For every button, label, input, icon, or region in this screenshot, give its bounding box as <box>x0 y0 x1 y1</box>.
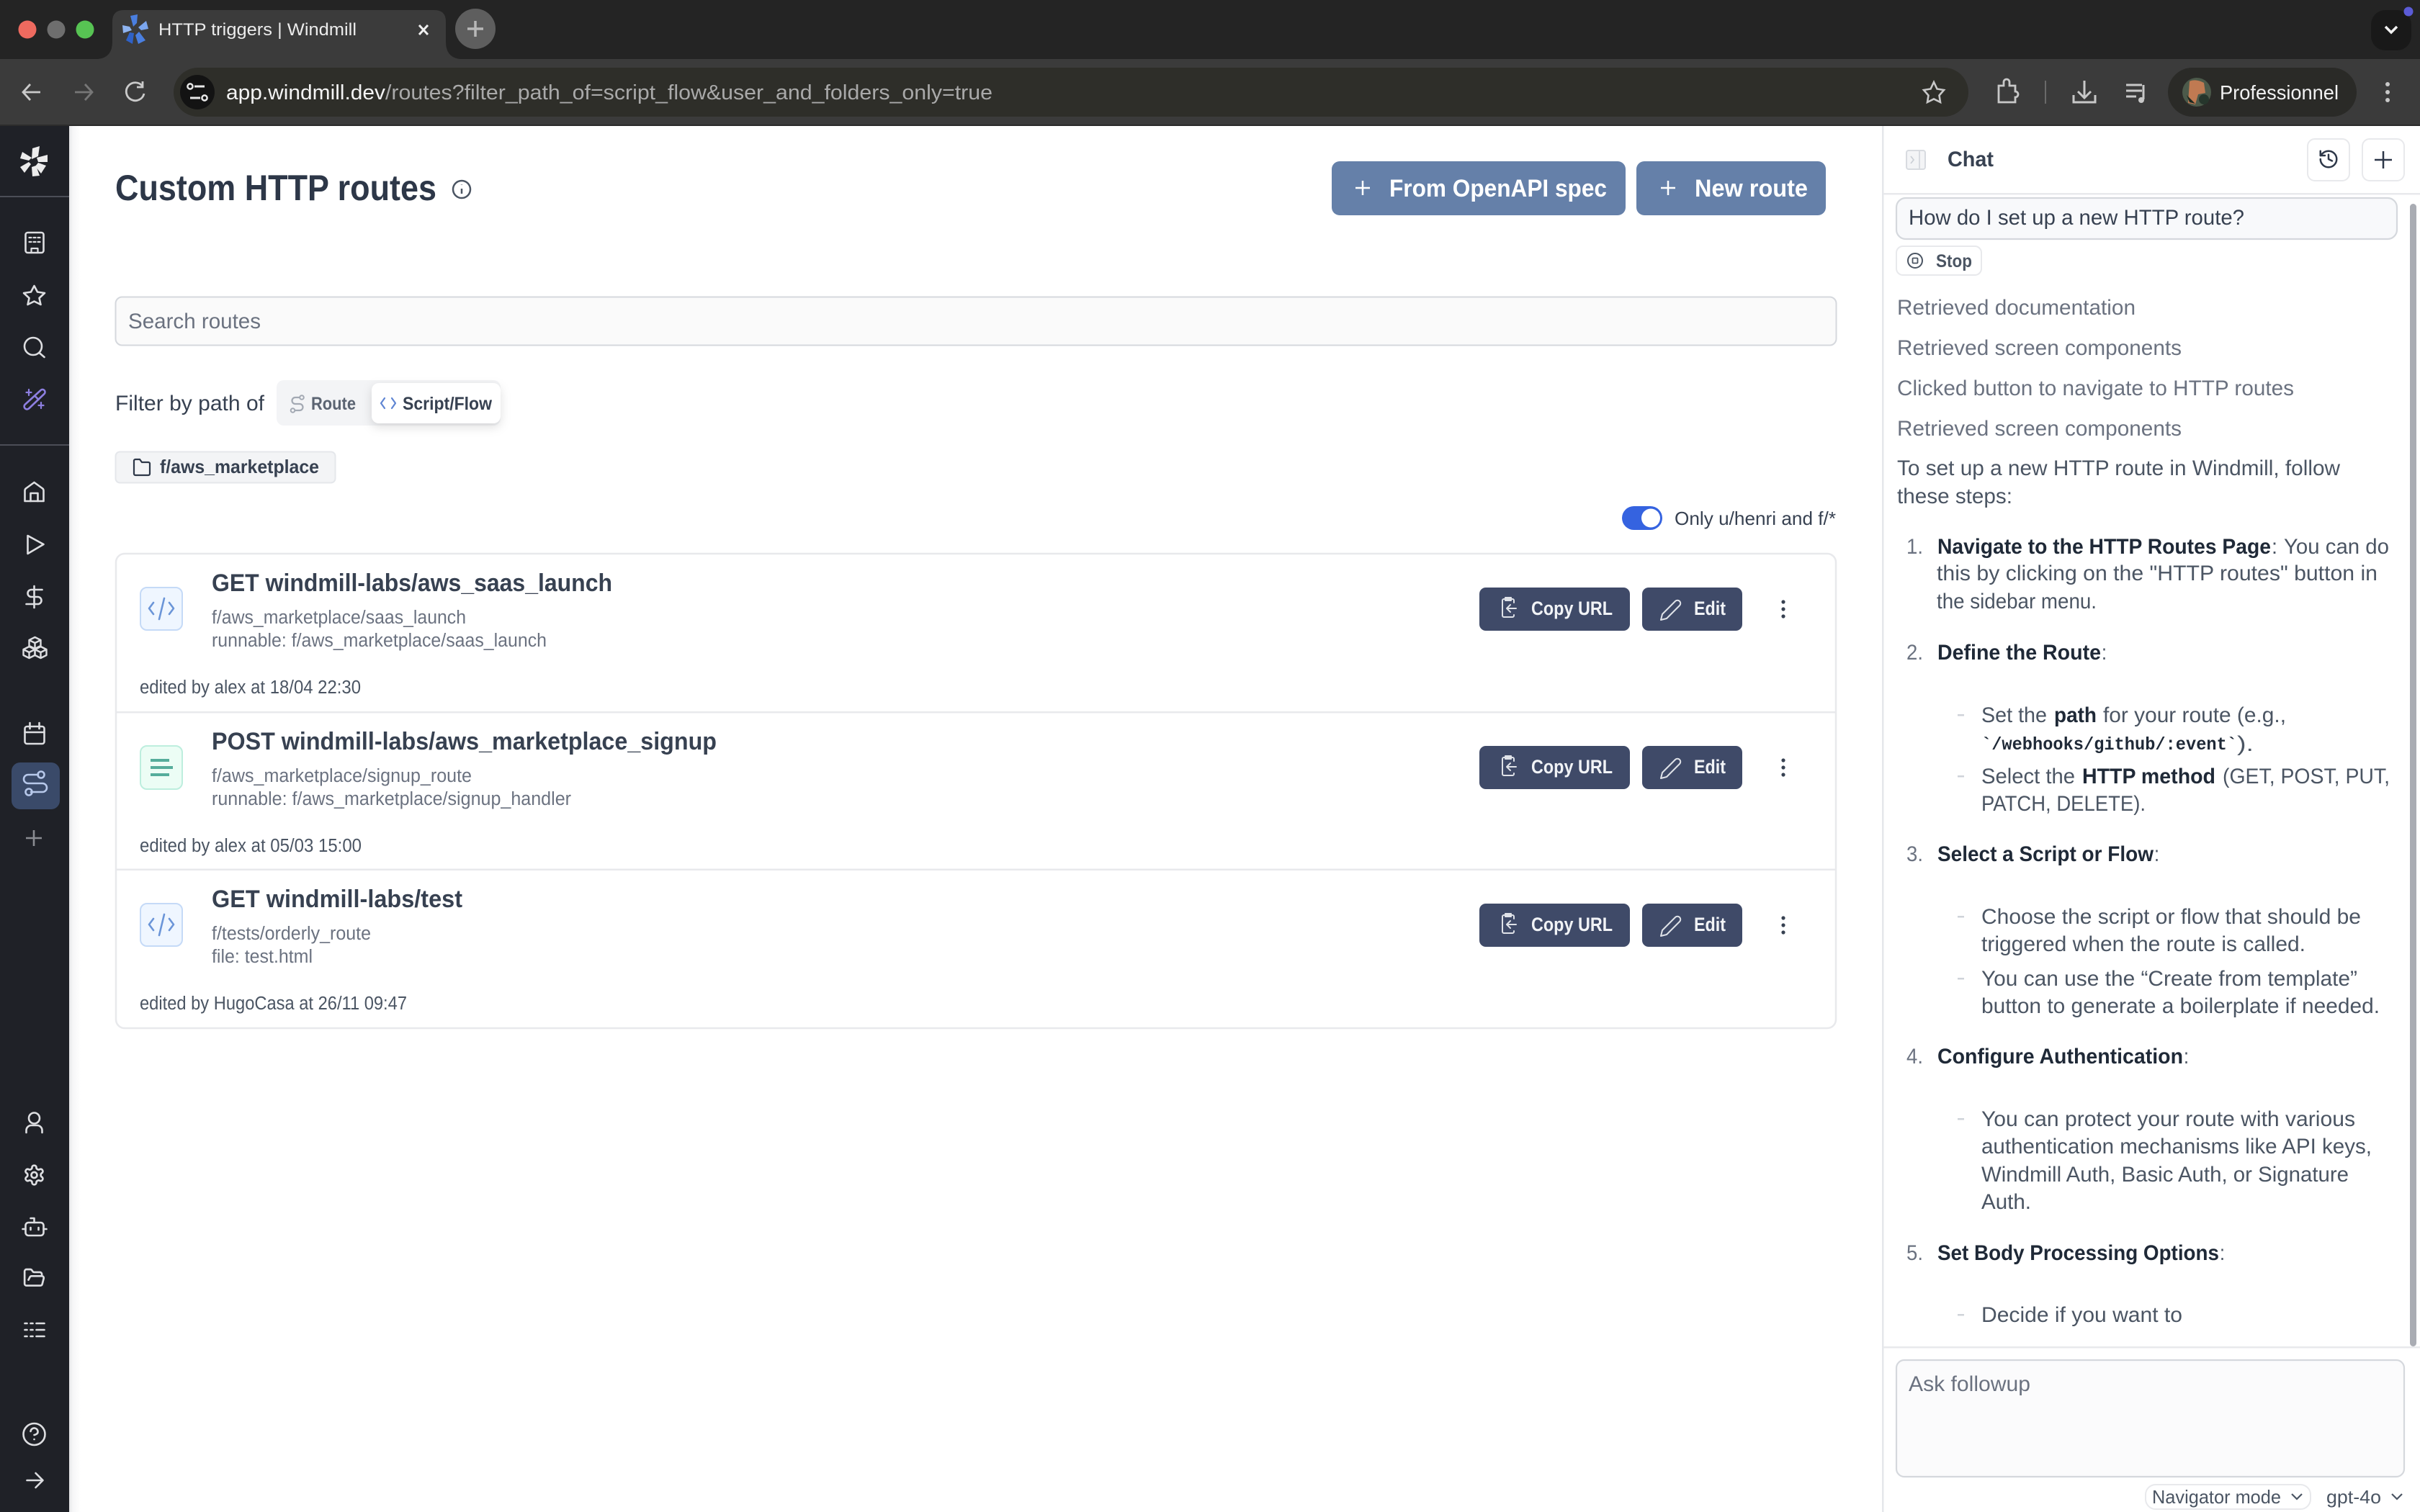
option: script/flow: Script/Flow <box>403 394 493 414</box>
browser tab bar <box>0 0 2420 59</box>
route row 1: f/aws_marketplace/saas_launch <box>212 608 466 628</box>
stop button <box>1896 246 1981 275</box>
profile pill <box>2168 68 2357 117</box>
icon: add nav item <box>26 830 42 846</box>
chat scrollbar <box>2410 204 2416 1346</box>
step 2: for your route (e.g., <box>2103 703 2286 727</box>
assistant answer <box>1897 456 2390 1327</box>
route row 1 <box>140 570 1785 698</box>
icon: home <box>24 482 43 501</box>
button: copy URL <box>1479 588 1630 631</box>
URL: app.windmill.dev <box>226 81 386 104</box>
button: from OpenAPI spec: From OpenAPI spec <box>1389 175 1607 202</box>
icon: folders <box>24 1269 44 1286</box>
icon: tab favicon <box>122 14 148 44</box>
answer intro <box>1897 456 2340 508</box>
route row 3: f/tests/orderly_route <box>212 924 371 944</box>
route row 2: POST windmill-labs/aws_marketplace_signup <box>212 728 717 755</box>
icon: windmill logo <box>20 146 48 176</box>
browser toolbar <box>0 59 2420 126</box>
route row 3: edited by HugoCasa at 26/11 09:47 <box>140 994 407 1014</box>
step 2: (GET, POST, PUT, <box>2223 765 2390 788</box>
icon: resources <box>23 637 46 658</box>
button: copy URL <box>1479 904 1630 947</box>
routes list panel <box>116 554 1836 1028</box>
button: edit <box>1642 588 1742 631</box>
button: history <box>2308 139 2349 181</box>
step 1: 1. <box>1906 535 1923 559</box>
profile pill: Professionnel <box>2220 81 2339 104</box>
option: route <box>291 394 356 414</box>
mode selector: Navigator mode <box>2152 1486 2281 1508</box>
icon: bookmark star <box>1924 82 1944 102</box>
icon: collapse <box>27 1473 43 1488</box>
step 2: : <box>2102 641 2107 665</box>
icon: settings <box>25 1166 42 1184</box>
route row 2: edited by alex at 05/03 15:00 <box>140 836 362 856</box>
step 2: HTTP method <box>2082 765 2215 788</box>
toggle: only user and folders <box>1622 506 1836 530</box>
user message: How do I set up a new HTTP route? <box>1909 206 2244 230</box>
step 5: 5. <box>1906 1241 1923 1265</box>
button: edit: Edit <box>1694 914 1726 935</box>
route row 2: runnable: f/aws_marketplace/signup_handler <box>212 789 571 809</box>
icon: tab close <box>419 25 428 35</box>
button: new route <box>1636 161 1826 215</box>
filter by path control <box>115 380 501 426</box>
route row 1: edited by alex at 18/04 22:30 <box>140 678 361 698</box>
step 4: authentication mechanisms like API keys, <box>1981 1135 2372 1158</box>
answer intro: these steps: <box>1897 485 2012 508</box>
tool status lines: Clicked button to navigate to HTTP routes <box>1897 377 2294 400</box>
icon: favorites <box>24 286 45 305</box>
icon: search <box>24 338 45 357</box>
step 5: Decide if you want to <box>1981 1303 2182 1327</box>
option: route: Route <box>311 394 356 414</box>
step 4: 4. <box>1906 1045 1923 1068</box>
step 1: You can do <box>2284 535 2389 559</box>
step 2 <box>1906 641 2390 816</box>
sidebar icons: bottom group <box>23 1113 46 1488</box>
tab title: HTTP triggers | Windmill <box>158 20 357 40</box>
icon: help <box>23 1423 45 1445</box>
button: new chat <box>2362 139 2404 181</box>
step 1: this by clicking on the "HTTP routes" button in <box>1937 562 2378 585</box>
model selector: gpt-4o <box>2326 1486 2381 1508</box>
step 1: Navigate to the HTTP Routes Page <box>1937 535 2271 559</box>
step 3 <box>1906 842 2380 1018</box>
icon: workers bot <box>23 1218 46 1236</box>
button: edit: Edit <box>1694 756 1726 778</box>
address bar <box>174 68 1968 117</box>
tool status lines <box>1897 296 2294 441</box>
tool status lines: Retrieved screen components <box>1897 336 2182 360</box>
icon: schedules <box>24 723 45 744</box>
icon: script <box>140 904 182 946</box>
button: edit <box>1642 746 1742 789</box>
step 2: ). <box>2237 732 2254 756</box>
route row 3: file: test.html <box>212 947 313 967</box>
page title: Custom HTTP routes <box>115 168 436 208</box>
icon: organisation <box>26 233 43 253</box>
step 3: You can use the “Create from template” <box>1981 967 2357 991</box>
stop button: Stop <box>1936 251 1972 271</box>
toggle: only user and folders: Only u/henri and f/* <box>1675 508 1836 529</box>
icon: browser menu <box>2385 82 2390 102</box>
step 4: Auth. <box>1981 1190 2031 1214</box>
icon: logs <box>24 1323 45 1336</box>
icon: extensions <box>1999 79 2018 102</box>
icon: AI wand <box>24 390 45 409</box>
icon: user <box>26 1113 42 1133</box>
active nav item: routes <box>12 762 60 809</box>
tab search pill <box>2371 7 2413 50</box>
step 3: button to generate a boilerplate if needed. <box>1981 994 2380 1018</box>
icon: download <box>2074 81 2095 102</box>
answer intro: To set up a new HTTP route in Windmill, follow <box>1897 456 2340 480</box>
step 2: Select the <box>1981 765 2075 788</box>
step 2: `/webhooks/github/:event` <box>1981 734 2237 755</box>
route row 2: f/aws_marketplace/signup_route <box>212 766 472 786</box>
search input: Search routes <box>128 310 261 333</box>
icon: dollar <box>26 586 42 608</box>
icon: forward arrow <box>75 84 92 100</box>
step 4: : <box>2184 1045 2189 1068</box>
button: copy URL: Copy URL <box>1531 756 1613 778</box>
step 3: : <box>2154 842 2159 866</box>
button: copy URL <box>1479 746 1630 789</box>
step 1: the sidebar menu. <box>1937 590 2097 613</box>
followup input <box>1896 1360 2404 1477</box>
route row 3 <box>140 886 1785 1014</box>
step 5: : <box>2220 1241 2225 1265</box>
new tab button <box>455 9 496 49</box>
page header <box>115 161 1826 215</box>
step 3: triggered when the route is called. <box>1981 932 2305 956</box>
icon: reload <box>126 81 144 101</box>
step 5 <box>1906 1241 2225 1327</box>
left sidebar <box>0 126 81 1512</box>
step 3: 3. <box>1906 842 1923 866</box>
step 4 <box>1906 1045 2372 1214</box>
step 4: Windmill Auth, Basic Auth, or Signature <box>1981 1163 2349 1187</box>
route row 3: GET windmill-labs/test <box>212 886 462 913</box>
icon: media queue <box>2126 85 2143 99</box>
URL: /routes?filter_path_of=script_flow&user_and_folders_only=true <box>385 81 992 104</box>
chat header <box>1883 139 2420 194</box>
icon: back arrow <box>23 84 40 100</box>
step 4: You can protect your route with various <box>1981 1107 2355 1131</box>
tool status lines: Retrieved screen components <box>1897 417 2182 441</box>
step 2: Set the <box>1981 703 2047 727</box>
button: from OpenAPI spec <box>1332 161 1626 215</box>
sidebar icons: main group <box>23 482 46 744</box>
filter by path control: Filter by path of <box>115 392 265 415</box>
icon: info <box>453 181 470 198</box>
step 3: Choose the script or flow that should be <box>1981 905 2361 929</box>
chat header: Chat <box>1948 148 1994 171</box>
step 1 <box>1906 535 2389 613</box>
button: copy URL: Copy URL <box>1531 914 1613 935</box>
followup input: Ask followup <box>1909 1372 2030 1396</box>
step 3: Select a Script or Flow <box>1937 842 2154 866</box>
active tab <box>98 10 460 59</box>
folder chip: f/aws_marketplace <box>160 456 319 477</box>
route row 1: GET windmill-labs/aws_saas_launch <box>212 570 612 597</box>
step 2: path <box>2054 703 2097 727</box>
button: copy URL: Copy URL <box>1531 598 1613 619</box>
user message <box>1896 198 2397 239</box>
step 2: 2. <box>1906 641 1923 665</box>
icon: more menu <box>1781 758 1785 777</box>
window controls <box>19 20 94 39</box>
step 1: : <box>2272 535 2277 559</box>
icon: more menu <box>1781 600 1785 618</box>
icon: flow <box>140 746 182 789</box>
folder chip <box>115 452 336 482</box>
button: edit: Edit <box>1694 598 1726 619</box>
tool status lines: Retrieved documentation <box>1897 296 2136 320</box>
icon: run <box>27 536 43 554</box>
step 4: Configure Authentication <box>1937 1045 2183 1068</box>
step 2: PATCH, DELETE). <box>1981 792 2146 816</box>
step 2: Define the Route <box>1937 641 2101 665</box>
button: new route: New route <box>1695 175 1808 202</box>
step 5: Set Body Processing Options <box>1937 1241 2219 1265</box>
icon: script <box>140 588 182 630</box>
icon: more menu <box>1781 916 1785 935</box>
search input <box>115 297 1837 346</box>
route row 1: runnable: f/aws_marketplace/saas_launch <box>212 631 547 651</box>
button: edit <box>1642 904 1742 947</box>
chat panel <box>1882 126 2420 1512</box>
route row 2 <box>140 728 1785 856</box>
sidebar icons: top group <box>24 233 45 409</box>
